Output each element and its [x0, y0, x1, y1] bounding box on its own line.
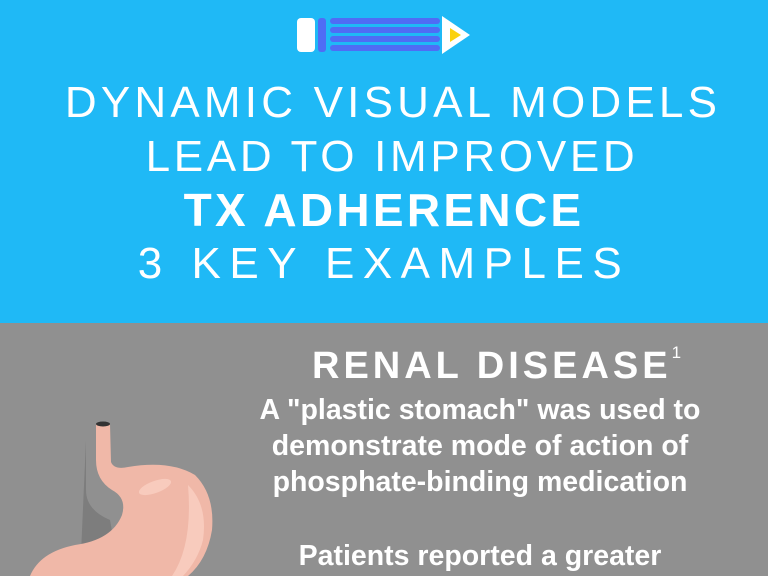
- text block: [260, 394, 700, 572]
- title: LEAD TO IMPROVED: [146, 132, 638, 181]
- icon: pencil: [297, 16, 470, 54]
- text block: phosphate-binding medication: [273, 466, 687, 498]
- header panel: [0, 0, 768, 323]
- title: [65, 78, 721, 288]
- heading: RENAL DISEASE1: [312, 343, 681, 387]
- title: TX ADHERENCE: [184, 184, 584, 236]
- title: 3 KEY EXAMPLES: [138, 239, 630, 288]
- icon: stomach: [30, 422, 212, 576]
- title: DYNAMIC VISUAL MODELS: [65, 78, 721, 127]
- text block: Patients reported a greater: [299, 540, 661, 572]
- text block: A "plastic stomach" was used to: [260, 394, 700, 426]
- text block: demonstrate mode of action of: [272, 430, 688, 462]
- panel: renal disease: [0, 323, 768, 576]
